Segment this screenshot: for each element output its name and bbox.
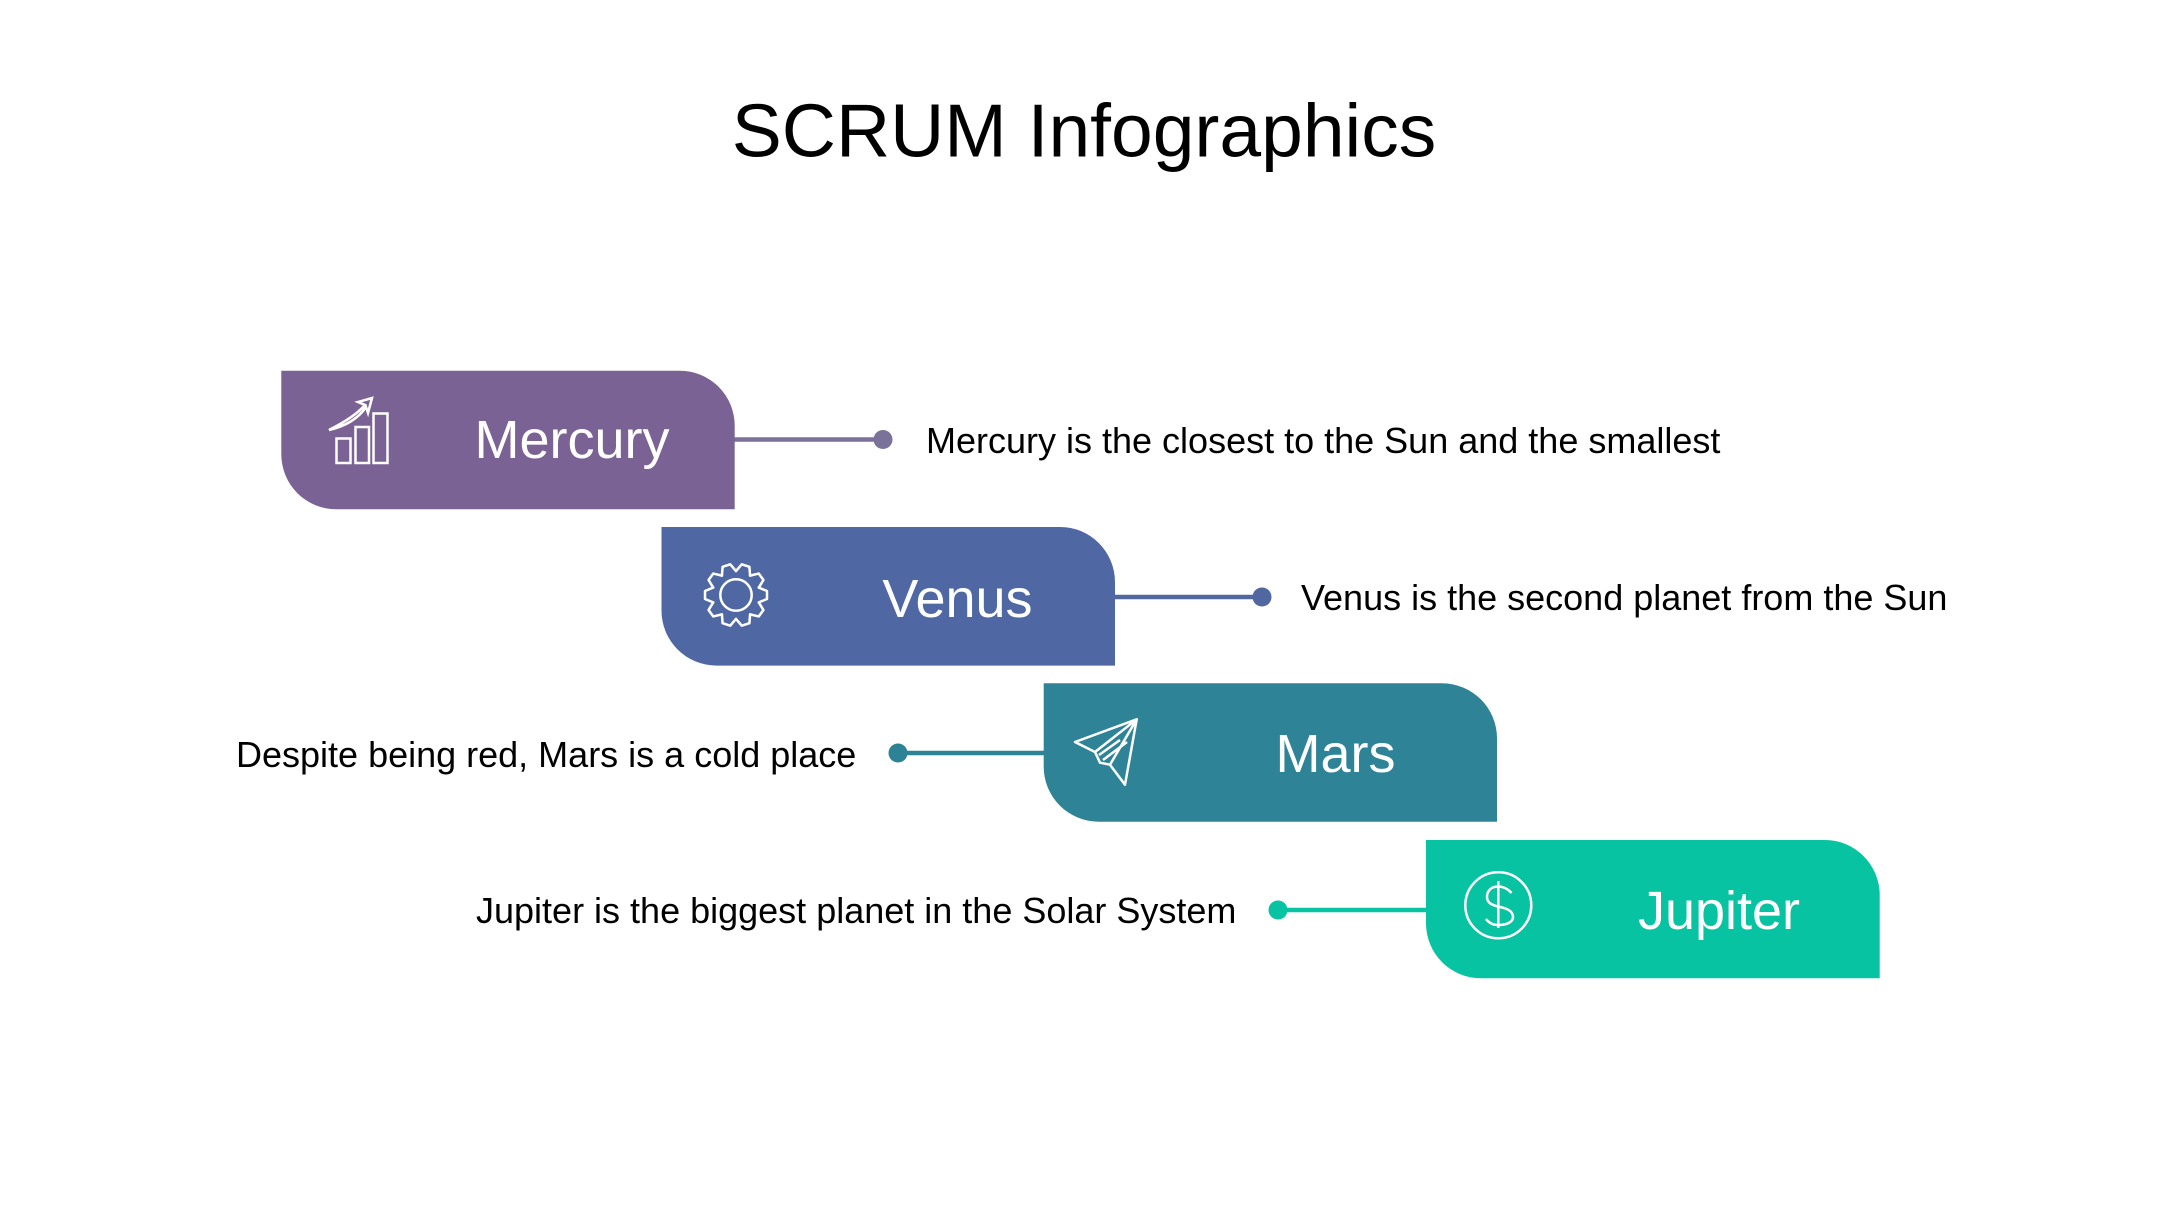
card: Jupiter — [1426, 840, 1880, 978]
panel: Venus row — [662, 527, 1947, 666]
description: Jupiter: Jupiter is the biggest planet in the Solar System — [476, 890, 1236, 931]
panel: Mars row — [236, 683, 1497, 822]
description: Mercury: Mercury is the closest to the Sun and the smallest — [926, 420, 1720, 461]
connector: Mars — [888, 744, 1044, 762]
icon: paper airplane — [1075, 719, 1137, 785]
card: Mercury — [281, 371, 735, 509]
description: Mars: Despite being red, Mars is a cold place — [236, 734, 856, 775]
icon: gear — [705, 563, 767, 627]
label: Mars: Mars — [1276, 724, 1396, 784]
label: Jupiter: Jupiter — [1638, 881, 1800, 941]
label: Mercury: Mercury — [474, 410, 670, 470]
label: Venus: Venus — [882, 569, 1033, 629]
panel: Jupiter row — [476, 840, 1880, 978]
title: SCRUM Infographics — [732, 88, 1436, 172]
icon: dollar coin — [1465, 872, 1531, 938]
connector: Mercury — [734, 430, 892, 449]
connector: Jupiter — [1268, 900, 1426, 920]
panel: Mercury row — [281, 371, 1720, 509]
description: Venus: Venus is the second planet from the Sun — [1301, 577, 1947, 618]
card: Venus — [662, 527, 1115, 666]
connector: Venus — [1114, 588, 1272, 606]
icon: bar chart with rising arrow — [329, 398, 388, 463]
card: Mars — [1044, 683, 1497, 822]
